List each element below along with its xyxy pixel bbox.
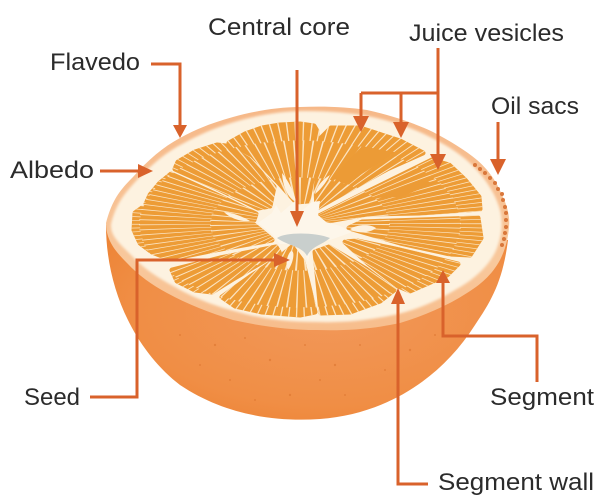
flavedo rim — [106, 107, 509, 330]
oil sacs — [473, 163, 508, 247]
label: Segment: Segment — [490, 384, 594, 411]
label: Segment wall: Segment wall — [438, 469, 594, 496]
label: Oil sacs: Oil sacs — [491, 93, 579, 120]
arrow: Segment wall — [391, 288, 428, 484]
arrow: Flavedo — [151, 64, 187, 138]
illustration: halved orange — [106, 107, 509, 420]
label: Flavedo: Flavedo — [50, 49, 140, 76]
juice vesicle pattern — [110, 125, 490, 323]
arrow: Seed — [90, 253, 290, 397]
label: Seed: Seed — [24, 384, 80, 411]
arrow: Central core — [290, 70, 304, 227]
arrow: Oil sacs — [490, 122, 506, 175]
peel speckles — [179, 334, 436, 401]
solid juice patches — [332, 146, 395, 184]
orange peel bowl — [106, 220, 508, 420]
arrow: Albedo — [100, 164, 153, 178]
label: Juice vesicles: Juice vesicles — [409, 20, 564, 47]
arrow: Juice vesicles — [353, 48, 446, 170]
arrow: Segment — [436, 270, 537, 382]
central core — [224, 173, 376, 270]
label: Albedo: Albedo — [10, 157, 94, 184]
albedo pith — [111, 111, 502, 322]
label: Central core: Central core — [208, 14, 350, 41]
fruit segments — [132, 122, 484, 318]
